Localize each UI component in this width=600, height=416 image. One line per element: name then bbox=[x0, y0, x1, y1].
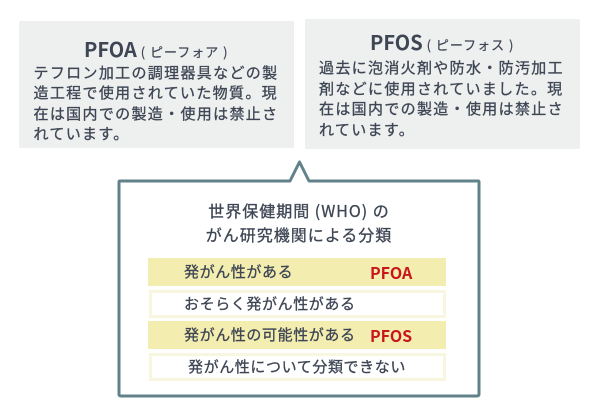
row: not classifiable bbox=[149, 353, 446, 381]
label: 発がん性の可能性がある bbox=[184, 324, 356, 345]
text block: PFOA description: 在は国内での製造・使用は禁止さ bbox=[34, 103, 278, 124]
text block: PFOS description: 在は国内での製造・使用は禁止さ bbox=[319, 98, 564, 119]
panel: PFOS bbox=[305, 19, 580, 149]
panel: PFOA bbox=[19, 21, 294, 148]
text block: PFOS description: 剤などに使用されていました。現 bbox=[319, 78, 564, 99]
text block: PFOA description: れています。 bbox=[34, 123, 130, 144]
heading: WHO classification: がん研究機関による分類 bbox=[206, 222, 392, 246]
heading: PFOA: PFOA ( ピーフォア ) bbox=[84, 34, 229, 63]
text block: PFOS description: れています。 bbox=[319, 119, 415, 140]
row: carcinogenic bbox=[148, 258, 446, 286]
tag: PFOA: PFOA bbox=[370, 260, 412, 284]
text block: PFOA description: 造工程で使用されていた物質。現 bbox=[34, 82, 278, 103]
row: probably carcinogenic bbox=[149, 290, 446, 318]
label: 発がん性がある bbox=[184, 261, 293, 282]
heading: WHO classification: 世界保健期間 (WHO) の bbox=[208, 198, 390, 222]
label: 発がん性について分類できない bbox=[188, 356, 406, 377]
text block: PFOS description bbox=[319, 57, 564, 140]
tag: PFOS: PFOS bbox=[370, 323, 412, 347]
text block: PFOS description: 過去に泡消火剤や防水・防汚加工 bbox=[319, 57, 564, 78]
heading: WHO classification bbox=[206, 198, 392, 246]
label: おそらく発がん性がある bbox=[184, 293, 356, 314]
row: possibly carcinogenic bbox=[148, 321, 446, 349]
text block: PFOA description bbox=[34, 62, 278, 144]
text block: PFOA description: テフロン加工の調理器具などの製 bbox=[34, 62, 278, 83]
heading: PFOS: PFOS ( ピーフォス ) bbox=[370, 27, 514, 56]
